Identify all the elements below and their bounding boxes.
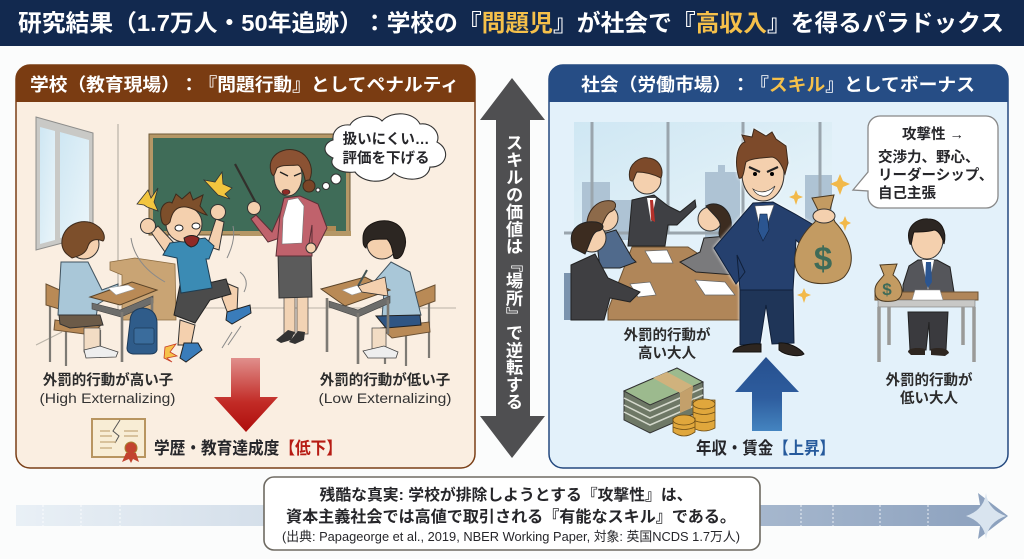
center arrow: value reverses by place — [480, 78, 545, 458]
student left: high externalizing — [46, 222, 157, 366]
meeting table — [608, 247, 742, 320]
classroom background — [36, 117, 456, 345]
standing colleague — [628, 158, 696, 246]
label: high externalizing adult — [624, 326, 711, 362]
panel: school (left) — [16, 65, 475, 468]
label: low externalizing adult — [886, 371, 973, 407]
label: low externalizing child: (Low Externalizing) — [318, 390, 452, 406]
small money bag — [875, 264, 902, 301]
label: high externalizing child: 外罰的行動が高い子 — [43, 371, 173, 389]
legs — [740, 288, 794, 345]
arms — [151, 226, 176, 252]
icon: anger bursts — [137, 188, 158, 211]
icon: backpack — [127, 308, 157, 354]
chair — [381, 285, 435, 366]
label: low externalizing child — [318, 371, 452, 406]
center arrow: value reverses by place: スキルの価値は『場所』で逆転する — [503, 134, 523, 410]
head — [274, 156, 302, 196]
high-externalizing businessman — [714, 129, 818, 356]
title bar — [0, 0, 1024, 46]
pants — [908, 312, 948, 350]
jacket — [714, 202, 818, 290]
legs — [284, 296, 295, 334]
thought bubble — [316, 114, 446, 192]
head — [742, 147, 784, 201]
shorts — [174, 279, 231, 323]
low-externalizing businessman at desk — [875, 219, 978, 362]
title bar: 研究結果（1.7万人・50年追跡）：学校の『問題児』が社会で『高収入』を得るパラドックス — [18, 9, 1004, 36]
icon: cash stack and coins — [624, 368, 715, 436]
teacher — [235, 150, 327, 344]
conclusion box: 残酷な真実: 学校が排除しようとする『攻撃性』は、 — [320, 485, 692, 504]
label: high externalizing child — [40, 371, 176, 406]
label: low externalizing adult: 外罰的行動が — [886, 371, 973, 389]
body — [372, 262, 421, 318]
window — [36, 117, 93, 250]
blackboard — [149, 134, 351, 236]
result text: education down: 学歴・教育達成度【低下】 — [154, 438, 342, 458]
office window — [564, 122, 832, 240]
label: high externalizing adult: 外罰的行動が — [624, 326, 711, 344]
pointer — [235, 164, 257, 205]
speech bubble: skills: 交渉力、野心、 — [878, 149, 980, 166]
raised leg — [222, 283, 238, 314]
seated woman left — [587, 201, 636, 268]
body — [58, 262, 118, 318]
office meeting scene — [564, 122, 832, 320]
jacket — [276, 196, 327, 256]
speech bubble: skills — [853, 116, 998, 208]
head — [69, 229, 99, 259]
head — [911, 221, 943, 259]
label: high externalizing child: (High Externalizing) — [40, 390, 176, 406]
thought bubble: 評価を下げる — [342, 150, 430, 167]
arrow: wages up — [735, 357, 799, 431]
panel heading: society: 社会（労働市場）：『 スキル』としてボーナス — [581, 75, 975, 95]
student center: acting out — [131, 172, 251, 362]
desk — [321, 277, 390, 306]
speech bubble: skills: リーダーシップ、 — [878, 166, 993, 184]
panel heading: school — [16, 65, 475, 102]
back desk — [110, 258, 176, 320]
thought bubble: 扱いにくい… — [343, 130, 429, 148]
skirt — [278, 248, 312, 298]
jacket — [903, 260, 954, 297]
back leg — [178, 320, 195, 345]
shirt — [163, 238, 214, 293]
arrow: education down — [214, 358, 278, 432]
desk — [90, 282, 157, 305]
head — [166, 206, 202, 242]
label: low externalizing child: 外罰的行動が低い子 — [320, 371, 450, 389]
chair — [46, 284, 100, 366]
desk — [875, 292, 978, 300]
icon: sparkles — [789, 174, 851, 303]
panel heading: school: 学校（教育現場）：『問題行動』としてペナルティ — [30, 74, 459, 95]
seated man left — [564, 222, 640, 320]
seated woman right — [680, 204, 735, 275]
speech bubble: skills: 自己主張 — [878, 184, 936, 202]
label: high externalizing adult: 高い大人 — [638, 345, 696, 362]
panel: society (right) — [549, 65, 1008, 468]
icon: torn diploma — [92, 419, 145, 463]
conclusion box: (出典: Papageorge et al., 2019, NBER Working Paper, 対象: 英国NCDS 1.7万人) — [282, 529, 740, 544]
bottom flow arrow — [16, 493, 1008, 539]
motion lines — [131, 226, 246, 348]
arm with pointer — [251, 200, 292, 242]
speech bubble: skills: 攻撃性 → — [902, 125, 964, 143]
head — [367, 229, 397, 259]
result text: wages up: 年収・賃金【上昇】 — [696, 438, 835, 458]
conclusion box: 資本主義社会では高値で取引される『有能なスキル』である。 — [286, 507, 736, 526]
student right: low externalizing — [321, 221, 435, 366]
panel heading: society — [549, 65, 1008, 102]
icon: money bag: $ — [814, 240, 832, 277]
conclusion box — [264, 477, 760, 550]
icon: money bag — [795, 195, 851, 284]
small money bag: $ — [882, 280, 892, 299]
label: low externalizing adult: 低い大人 — [900, 390, 958, 407]
